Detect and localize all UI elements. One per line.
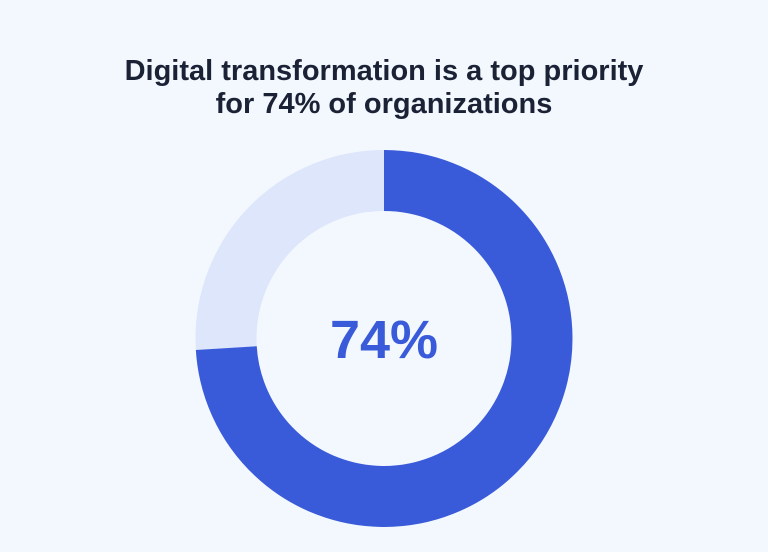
title: for 74% of organizations [216, 88, 552, 120]
center value: 74% [330, 310, 438, 370]
track: remaining 26% [226, 180, 542, 496]
title: Digital transformation is a top priority [125, 55, 643, 87]
title [125, 55, 644, 120]
arc: 74% [226, 180, 542, 496]
